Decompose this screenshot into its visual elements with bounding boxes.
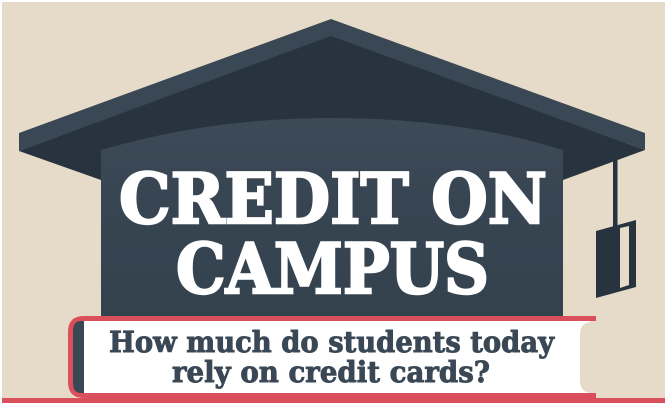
tassel cord (613, 160, 618, 230)
cap board underside (19, 36, 645, 316)
cap board top edge (19, 19, 645, 151)
subtitle text (109, 325, 555, 389)
banner white page (84, 321, 590, 393)
graduation cap (19, 19, 645, 316)
banner dark spine (73, 321, 84, 393)
tassel end (596, 220, 636, 298)
subtitle line 1: How much do students today (109, 325, 555, 359)
title line 2: CAMPUS (176, 229, 489, 310)
subtitle banner (68, 316, 596, 398)
banner red frame (68, 316, 596, 398)
title line 1: CREDIT ON (119, 159, 547, 240)
subtitle line 2: rely on credit cards? (172, 355, 490, 389)
title (119, 159, 547, 310)
bottom red line (2, 398, 665, 403)
cap body (101, 118, 563, 316)
tassel (596, 160, 636, 298)
